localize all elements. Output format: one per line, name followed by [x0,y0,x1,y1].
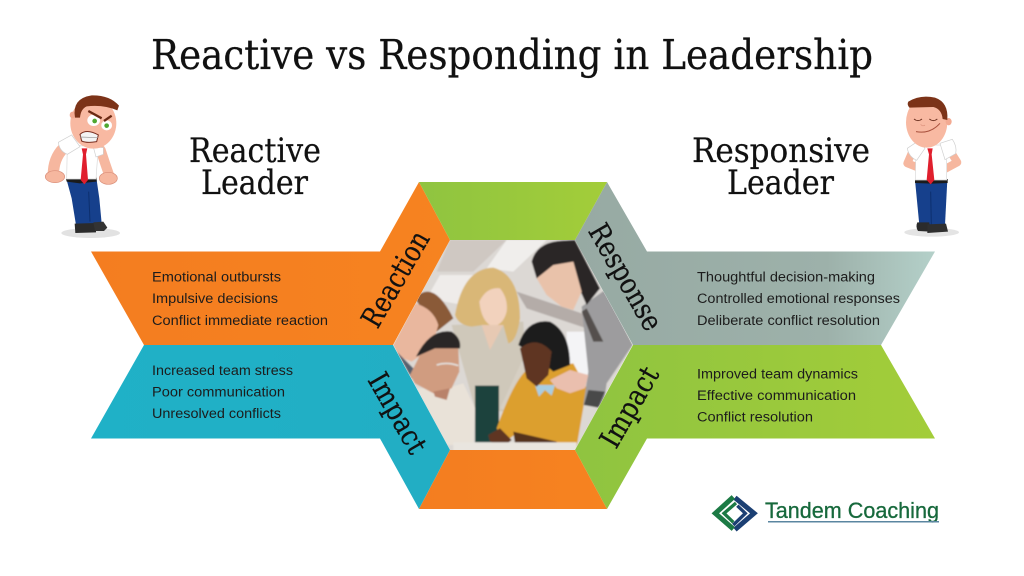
panel: response band [575,182,935,345]
woman with blonde hair [452,268,527,442]
back man [393,292,453,378]
label: reaction: Reaction [354,225,437,333]
panel: reactive impact band [91,345,450,509]
list: reactive impacts [152,363,293,421]
list: reactive impacts: Unresolved conflicts [152,406,281,421]
list: reactive impacts: Increased team stress [152,363,293,378]
label: reactive impact: Impact [361,366,435,460]
list: response traits [697,270,900,328]
list: reactive impacts: Poor communication [152,384,285,400]
label: responsive impact: Impact [593,360,666,454]
heading: responsive leader [692,131,870,203]
logo: tandem coaching [715,497,939,530]
list: response traits: Controlled emotional responses [697,291,900,306]
icon: angry cartoon manager [45,95,120,238]
woman in gray jacket [532,240,633,408]
list: responsive impacts: Effective communication [697,388,856,403]
label: response: Response [581,217,670,337]
list: response traits: Thoughtful decision-making [697,270,875,284]
icon: calm cartoon manager [904,97,959,237]
panel: top hexagon bar [419,182,607,240]
heading: reactive leader: Leader [201,163,309,203]
panel: team photo [390,238,637,452]
list: reaction traits: Conflict immediate reaction [152,313,328,328]
list: reaction traits [152,270,328,328]
heading: responsive leader: Leader [727,163,835,203]
woman in yellow sweater [488,321,587,447]
logo: tandem coaching: Tandem Coaching [765,498,939,523]
panel: reaction band [91,182,450,345]
heading: reactive leader: Reactive [189,131,321,171]
panel: bottom hexagon bar [419,450,607,509]
list: responsive impacts: Improved team dynamics [697,366,858,382]
panel: responsive impact band [575,345,935,509]
heading: reactive leader [189,131,321,203]
list: responsive impacts [697,366,858,424]
table [453,442,577,452]
heading: responsive leader: Responsive [692,131,870,171]
title: Reactive vs Responding in Leadership [151,31,873,79]
list: reaction traits: Emotional outbursts [152,270,281,284]
list: reaction traits: Impulsive decisions [152,291,278,306]
icon: interlocked diamonds [715,497,754,530]
man with glasses [410,331,475,445]
list: responsive impacts: Conflict resolution [697,410,813,424]
list: response traits: Deliberate conflict resolution [697,313,880,328]
